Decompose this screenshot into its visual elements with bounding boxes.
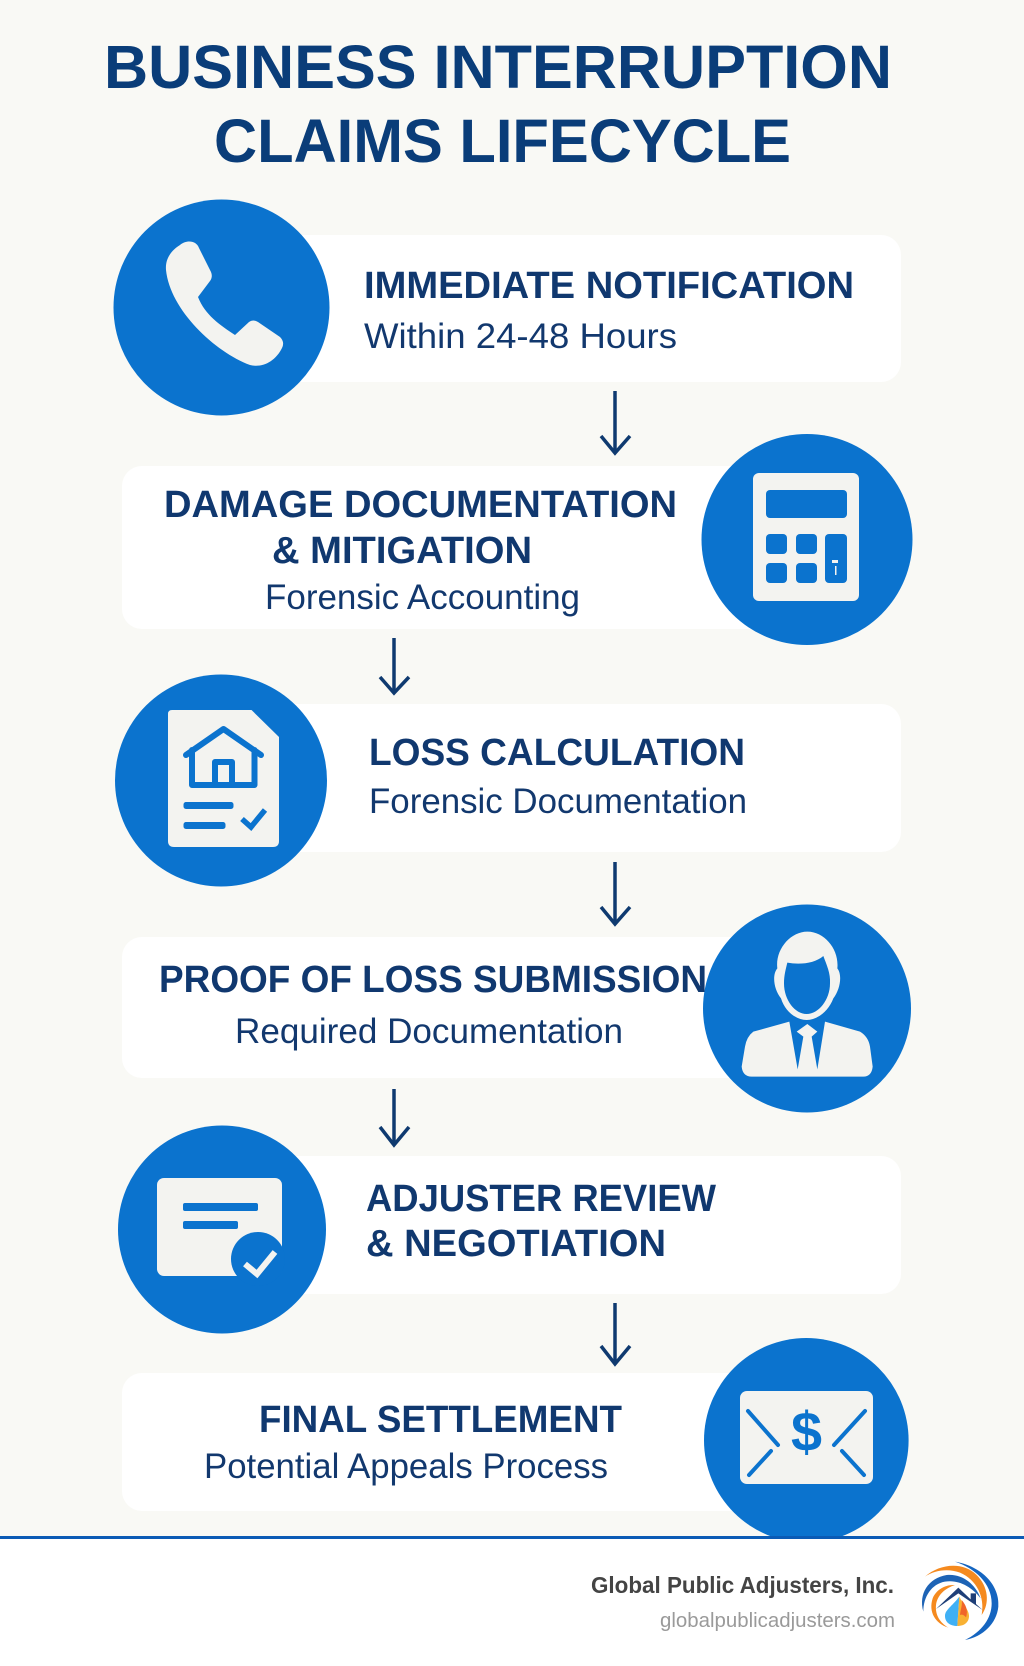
logo <box>922 1562 998 1640</box>
heading: step 2 <box>164 484 677 572</box>
step 4: proof of loss submission <box>122 904 911 1112</box>
icon: calculator in circle <box>702 434 912 645</box>
title <box>104 33 892 175</box>
card: step 2 <box>122 466 802 629</box>
subheading: step 6: Potential Appeals Process <box>204 1447 608 1486</box>
heading: step 4: PROOF OF LOSS SUBMISSION <box>159 959 707 1001</box>
subheading: step 4: Required Documentation <box>235 1012 623 1051</box>
heading: step 2: & MITIGATION <box>272 530 532 572</box>
subheading: step 2: Forensic Accounting <box>265 578 580 617</box>
arrow: step 4 to 5 <box>380 1089 409 1145</box>
arrow: step 3 to 4 <box>601 862 630 924</box>
icon: document with house in circle <box>115 674 327 886</box>
company name: Global Public Adjusters, Inc. <box>591 1572 894 1598</box>
step 5: adjuster review <box>118 1126 901 1334</box>
icon: approved document in circle <box>118 1126 326 1334</box>
heading: step 5: & NEGOTIATION <box>366 1223 666 1265</box>
footer <box>0 1536 1024 1666</box>
icon: envelope with dollar in circle: $ <box>791 1400 822 1463</box>
card: step 4 <box>122 937 802 1078</box>
website: globalpublicadjusters.com <box>660 1609 895 1632</box>
heading: step 5 <box>366 1178 716 1265</box>
title: BUSINESS INTERRUPTION <box>104 33 892 101</box>
card: step 6 <box>122 1373 802 1511</box>
subheading: step 3: Forensic Documentation <box>369 782 747 821</box>
heading: step 2: DAMAGE DOCUMENTATION <box>164 484 677 526</box>
step 6: final settlement <box>122 1338 909 1543</box>
icon: envelope with dollar in circle <box>704 1338 909 1543</box>
step 1: immediate notification <box>114 200 901 416</box>
card: step 5 <box>200 1156 901 1294</box>
card: step 1 <box>200 235 901 382</box>
card: step 3 <box>200 704 901 852</box>
step 2: damage documentation <box>122 434 912 645</box>
arrow: step 5 to 6 <box>601 1303 630 1364</box>
step 3: loss calculation <box>115 674 901 886</box>
heading: step 3: LOSS CALCULATION <box>369 732 745 774</box>
heading: step 6: FINAL SETTLEMENT <box>259 1399 622 1441</box>
icon: phone in circle <box>114 200 330 416</box>
heading: step 5: ADJUSTER REVIEW <box>366 1178 716 1220</box>
heading: step 1: IMMEDIATE NOTIFICATION <box>364 265 854 307</box>
icon: person in suit in circle <box>703 904 911 1112</box>
arrow: step 2 to 3 <box>380 638 409 693</box>
arrow: step 1 to 2 <box>601 391 630 453</box>
subheading: step 1: Within 24-48 Hours <box>364 317 677 356</box>
title: CLAIMS LIFECYCLE <box>214 107 791 175</box>
